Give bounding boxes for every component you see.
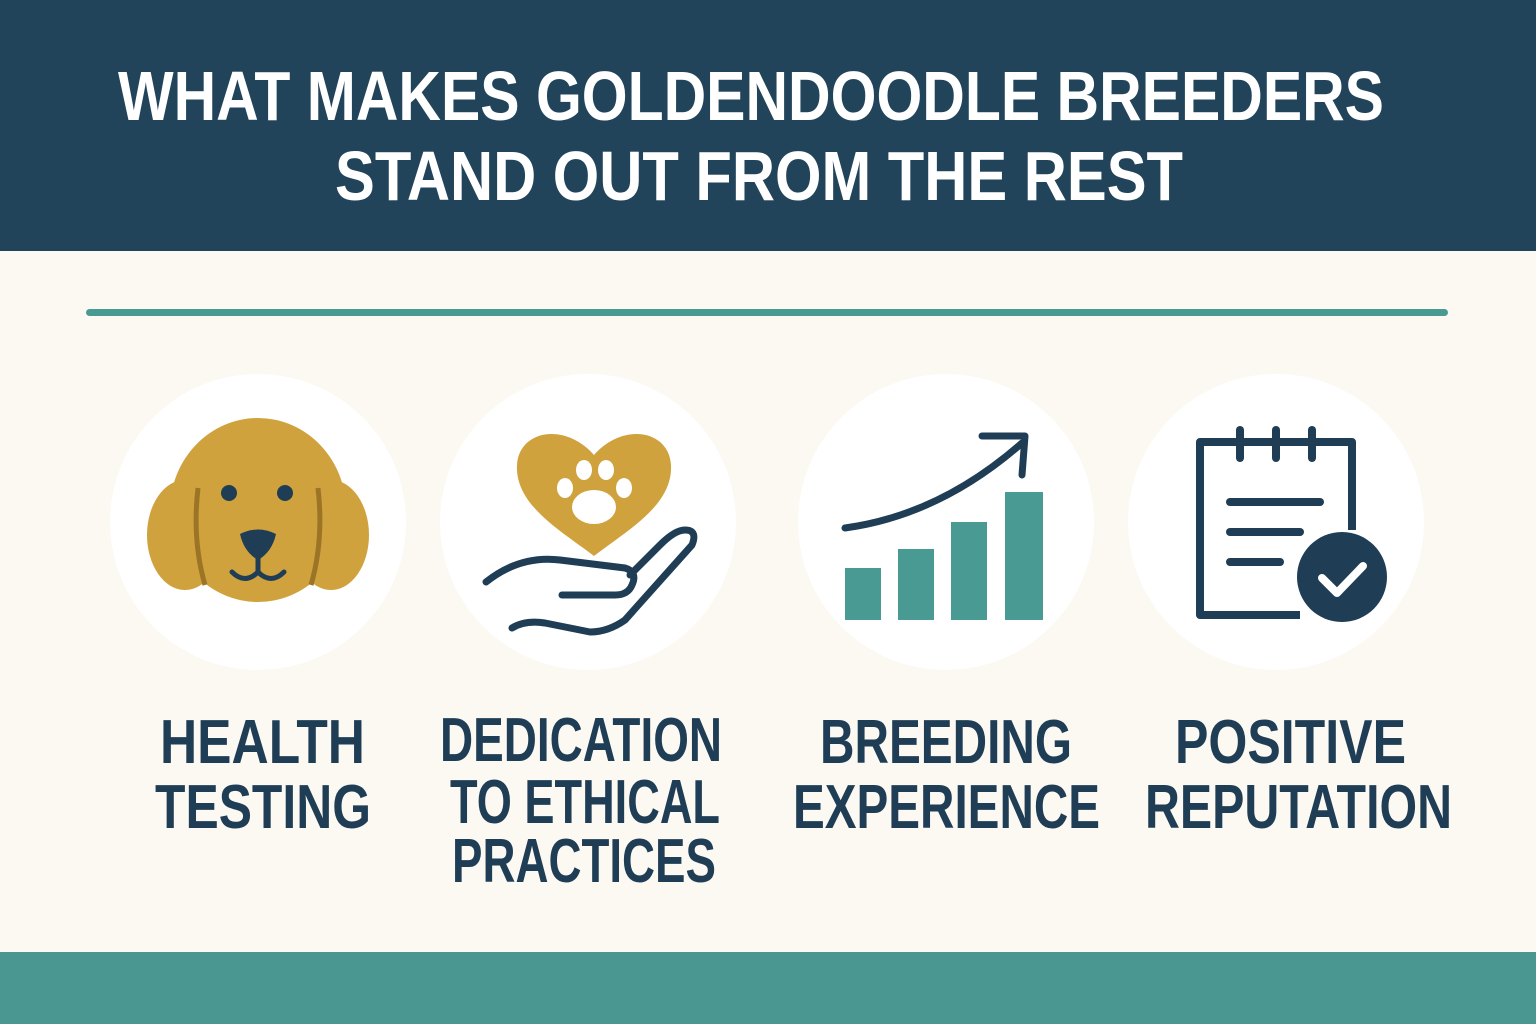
label: positive reputation bbox=[1145, 708, 1452, 842]
label: dedication to ethical practices: TO ETHICAL bbox=[450, 768, 720, 837]
label: health testing: HEALTH bbox=[160, 708, 365, 777]
header banner bbox=[0, 0, 1536, 251]
label: positive reputation: REPUTATION bbox=[1145, 773, 1452, 842]
icon: clipboard with check bbox=[1128, 374, 1424, 670]
label: breeding experience: BREEDING bbox=[820, 708, 1072, 777]
label: dedication to ethical practices bbox=[440, 706, 722, 896]
label: dedication to ethical practices: DEDICATION bbox=[440, 706, 722, 775]
label: positive reputation: POSITIVE bbox=[1175, 708, 1406, 777]
footer band bbox=[0, 952, 1536, 1024]
label: health testing bbox=[155, 708, 371, 842]
label: dedication to ethical practices: PRACTICES bbox=[452, 827, 716, 896]
icon: heart with paw in hand bbox=[440, 374, 736, 670]
label: health testing: TESTING bbox=[155, 773, 371, 842]
title: STAND OUT FROM THE REST bbox=[335, 137, 1183, 215]
label: breeding experience bbox=[793, 708, 1100, 842]
label: breeding experience: EXPERIENCE bbox=[793, 773, 1100, 842]
icon: dog face (health testing) bbox=[110, 374, 406, 670]
icon: bar chart with arrow bbox=[798, 374, 1094, 670]
title bbox=[118, 57, 1384, 215]
